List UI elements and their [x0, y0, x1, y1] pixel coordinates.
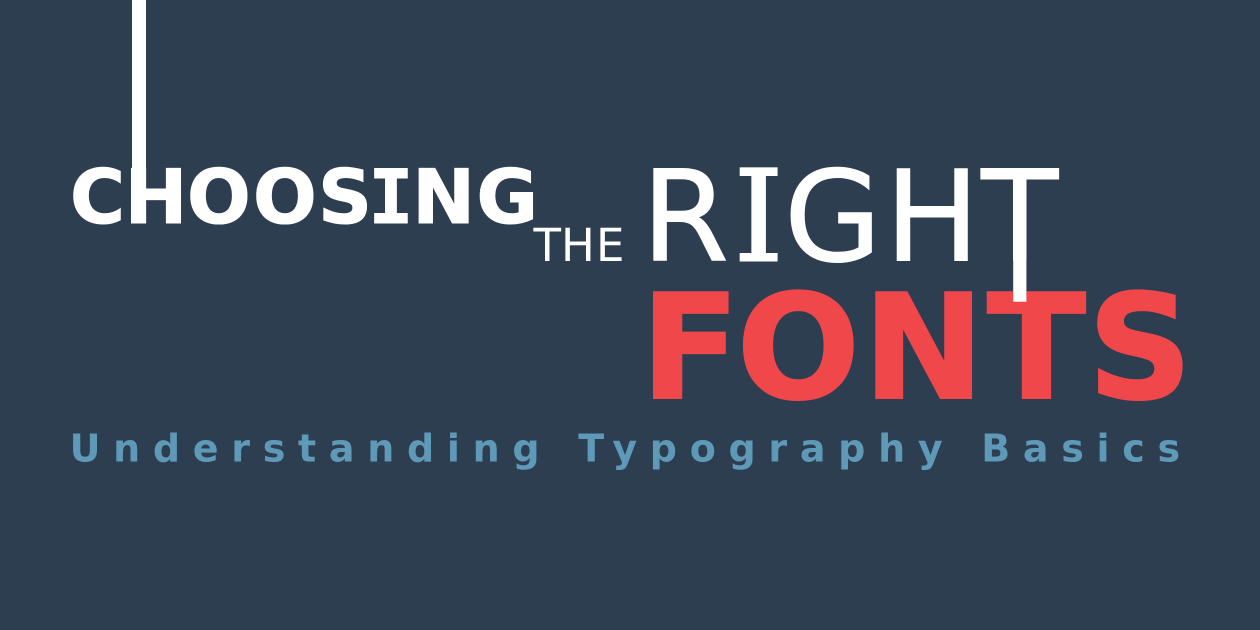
- heading word: CHOOSING: I: [368, 153, 414, 241]
- heading word: CHOOSING: CHOOS: [70, 153, 372, 241]
- subtitle: Understanding Typography Basics: [70, 427, 1193, 471]
- heading word: THE: THE: [532, 219, 624, 272]
- heading word: FONTS: FONTS: [641, 264, 1192, 433]
- heading word: CHOOSING: NG: [412, 153, 538, 241]
- heading word: RIGHT: I: [734, 144, 784, 291]
- vertical bar extending the T of RIGHT into FONTS: [1013, 175, 1026, 302]
- heading word: RIGHT: GHT: [784, 144, 1059, 291]
- vertical bar rising from the H of CHOOSING: [132, 0, 146, 223]
- heading word: RIGHT: R: [642, 144, 729, 291]
